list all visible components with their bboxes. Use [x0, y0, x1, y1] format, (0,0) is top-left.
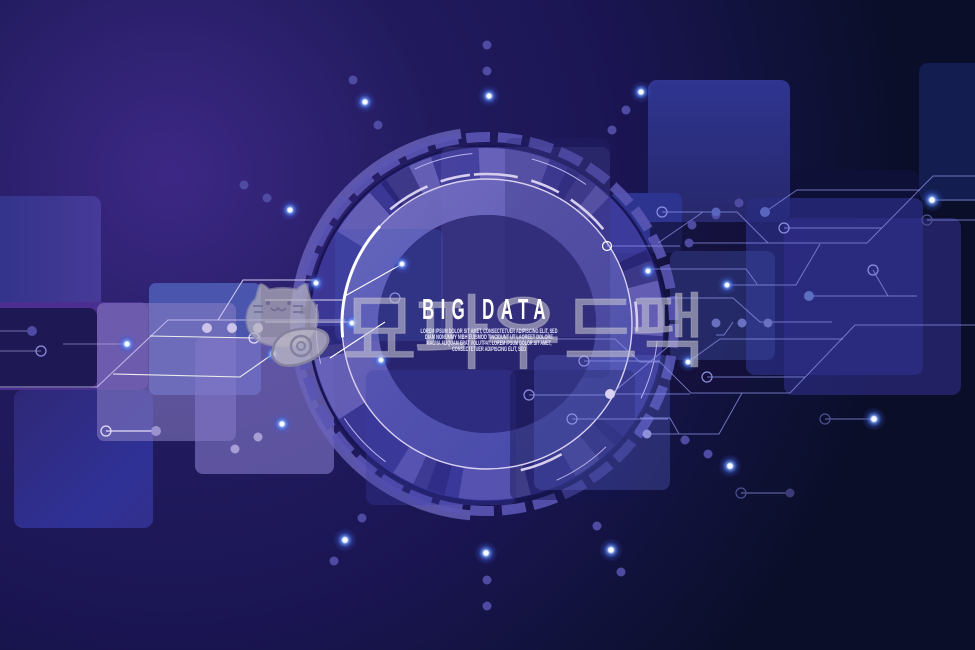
watermark text	[342, 287, 706, 380]
circuit lines: left	[0, 264, 402, 431]
body text: DIAM NONUMMY NIBH EUISMOD TINCIDUNT UT LAOREET DOLORE	[425, 335, 553, 341]
ring: circular HUD	[264, 101, 710, 547]
panel: squares overlaying ring	[335, 138, 670, 505]
watermark text: 드	[563, 287, 638, 378]
watermark text: 우	[486, 289, 561, 380]
watermark text: 묘	[342, 287, 417, 378]
ring: bright arcs	[260, 97, 714, 551]
body text: LOREM IPSUM DOLOR SIT AMET, CONSECTETUER ADIPISCING ELIT, SED	[420, 329, 558, 335]
body text	[420, 329, 558, 353]
panel: right translucent squares	[610, 63, 975, 395]
watermark: cat and camera icon	[247, 285, 328, 366]
panel: left translucent squares	[0, 196, 334, 528]
body text: CONSECTETUER ADIPISCING ELIT, SED	[452, 347, 526, 353]
body text: MAGNA ALIQUAM ERAT VOLUTPAT. LOREM IPSUM DOLOR SIT AMET,	[426, 341, 552, 347]
glowing nodes	[116, 81, 944, 565]
watermark text: 팩	[631, 287, 706, 378]
connector circles	[36, 207, 932, 498]
small dots	[27, 40, 814, 610]
title: BIG DATA	[422, 295, 552, 326]
watermark text: 파	[414, 289, 489, 380]
circuit lines: right	[529, 176, 975, 493]
